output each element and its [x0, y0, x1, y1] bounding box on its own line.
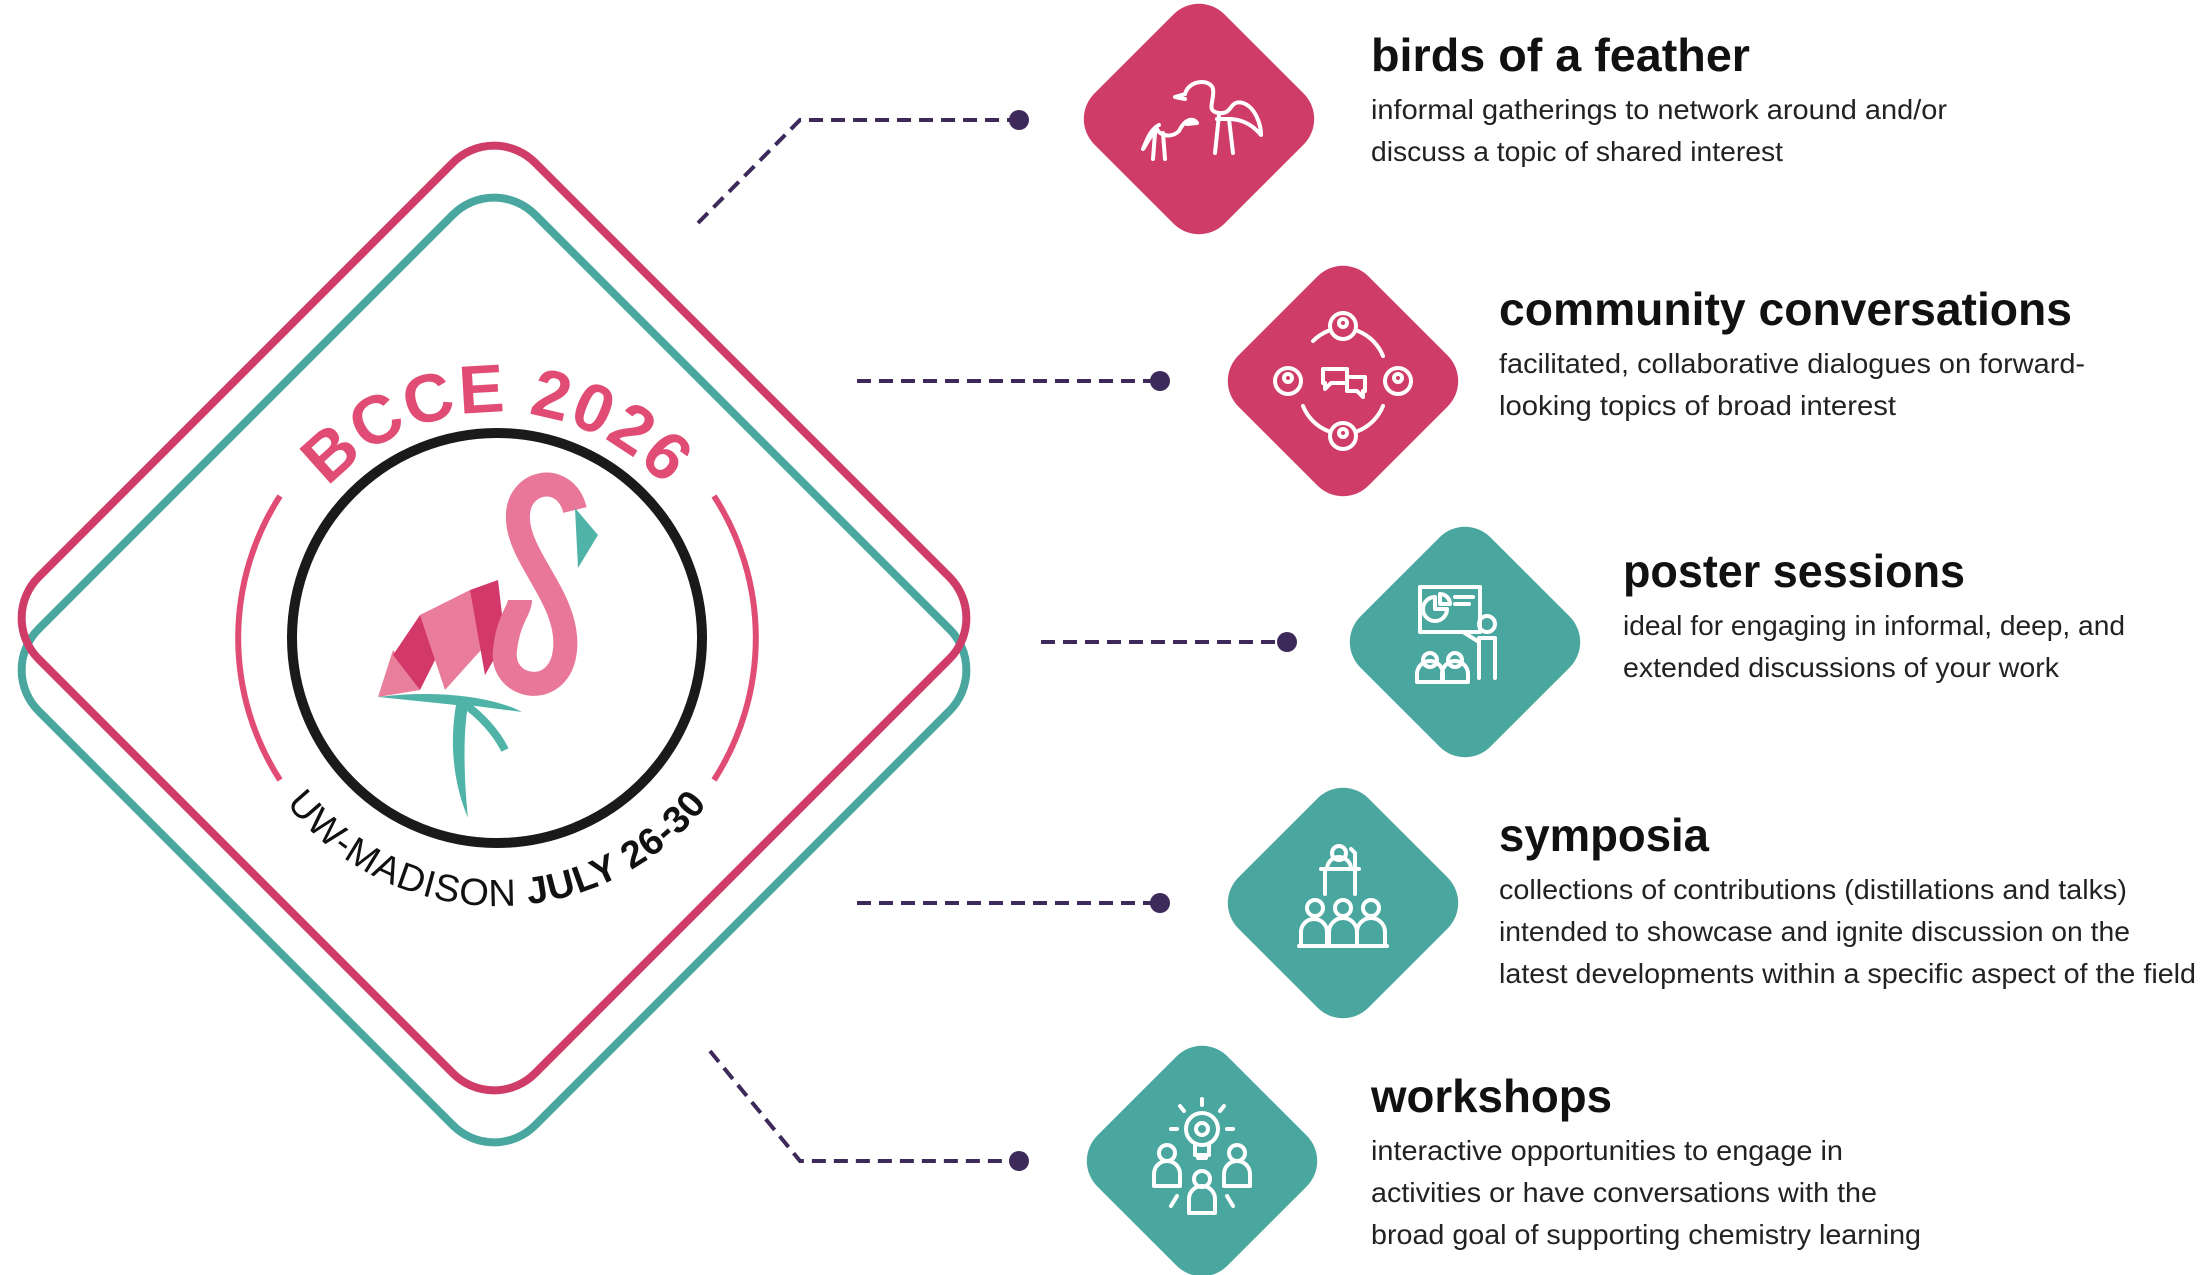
text: birds desc: discuss a topic of shared interest	[1371, 136, 1783, 167]
text: community desc: looking topics of broad interest	[1499, 390, 1896, 421]
text: workshops desc	[1371, 1135, 1921, 1250]
text: workshops desc: broad goal of supporting chemistry learning	[1371, 1219, 1921, 1250]
heading: birds of a feather: birds of a feather	[1371, 29, 1750, 81]
text: symposia desc: collections of contributions (distillations and talks)	[1499, 874, 2127, 905]
title arc: BCCE 2026: BCCE 2026	[300, 364, 690, 484]
text: workshops desc: activities or have conversations with the	[1371, 1177, 1877, 1208]
teal diamond frame	[0, 174, 990, 1166]
text: poster desc: extended discussions of your work	[1623, 652, 2060, 683]
heading: poster sessions: poster sessions	[1623, 545, 1965, 597]
icon: poster sessions	[1335, 512, 1595, 772]
connector 2	[857, 371, 1170, 391]
text: community desc: facilitated, collaborative dialogues on forward-	[1499, 348, 2085, 379]
icon: symposia	[1213, 773, 1473, 1033]
heading: workshops: workshops	[1370, 1070, 1612, 1122]
bottom arc text: UW-MADISON JULY 26-30	[291, 788, 703, 906]
connector 5	[710, 1051, 1029, 1171]
text: symposia desc: intended to showcase and ignite discussion on the	[1499, 916, 2130, 947]
text: symposia desc	[1499, 874, 2196, 989]
pink side arcs	[238, 496, 756, 780]
connector 4	[857, 893, 1170, 913]
pink diamond frame	[0, 122, 990, 1114]
flamingo logo	[378, 485, 598, 818]
black circle	[292, 433, 702, 843]
heading: community conversations: community conversations	[1499, 283, 2072, 335]
text: birds desc: informal gatherings to network around and/or	[1371, 94, 1947, 125]
connector 3	[1041, 632, 1297, 652]
text: poster desc: ideal for engaging in informal, deep, and	[1623, 610, 2125, 641]
text: poster desc	[1623, 610, 2125, 683]
text: workshops desc: interactive opportunities to engage in	[1371, 1135, 1843, 1166]
icon: workshops	[1072, 1031, 1332, 1275]
text: symposia desc: latest developments within a specific aspect of the field	[1499, 958, 2196, 989]
icon: birds of a feather	[1069, 0, 1329, 249]
text: community desc	[1499, 348, 2085, 421]
logo badge	[18, 142, 970, 1146]
heading: symposia: symposia	[1499, 809, 1709, 861]
connector 1	[698, 120, 1012, 223]
text: birds desc	[1371, 94, 1947, 167]
icon: community conversations	[1213, 251, 1473, 511]
